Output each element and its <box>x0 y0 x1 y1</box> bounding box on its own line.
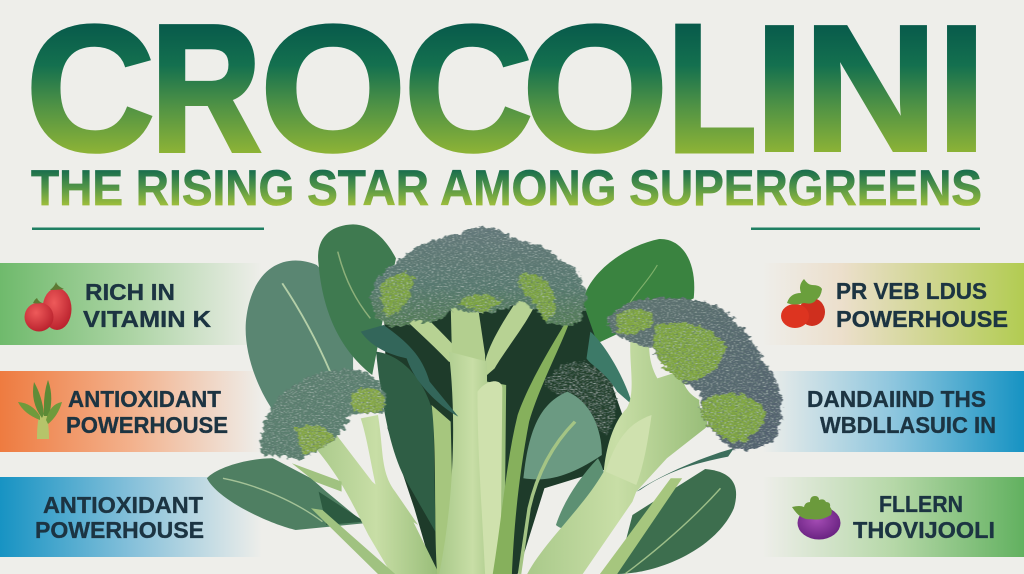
icon: tomatoes <box>24 282 72 332</box>
icon: purple onion <box>792 496 840 540</box>
floret: central green accents <box>380 273 556 322</box>
leaf: back top <box>318 224 396 375</box>
label: middle right text: DANDAIIND THS <box>807 386 986 412</box>
leaf: lower left <box>207 458 365 530</box>
label: rich in vitamin K <box>83 279 211 332</box>
label: bottom right text: THOVIJOOLI <box>853 517 995 543</box>
leaf: center front <box>520 392 602 574</box>
panel: top right <box>762 263 1024 345</box>
label: top right text <box>836 278 1008 332</box>
label: rich in vitamin K: RICH IN <box>85 279 175 305</box>
floret: right green center <box>617 309 766 442</box>
stem: thin far left <box>292 463 395 574</box>
stem: narrow blade <box>493 310 573 574</box>
floret: lower left <box>260 369 386 460</box>
label: rich in vitamin K: VITAMIN K <box>83 306 211 332</box>
panel: antioxidant powerhouse blue <box>0 477 262 557</box>
label: antioxidant powerhouse: ANTIOXIDANT <box>43 492 203 518</box>
floret: large right <box>608 298 782 450</box>
label: middle right text <box>807 386 996 438</box>
label: antioxidant powerhouse: ANTIOXIDANT <box>68 386 221 412</box>
title <box>26 0 986 190</box>
stem: right main <box>527 337 734 574</box>
leaf: center front lower <box>556 458 606 529</box>
stem: central <box>391 290 539 574</box>
leaf: small teal right <box>587 332 632 405</box>
dark inner foliage <box>384 302 625 574</box>
stem: side left <box>313 415 439 574</box>
panel: rich in vitamin K <box>0 263 262 345</box>
leaf: back right <box>583 239 694 348</box>
label: top right text: PR VEB LDUS <box>836 278 987 304</box>
panel: antioxidant powerhouse orange <box>0 371 262 452</box>
panel: bottom right <box>762 477 1024 557</box>
label: bottom right text <box>853 491 995 543</box>
label: antioxidant powerhouse <box>35 492 204 543</box>
label: top right text: POWERHOUSE <box>836 306 1008 332</box>
dark floret behind <box>544 362 616 435</box>
label: antioxidant powerhouse: POWERHOUSE <box>66 412 228 438</box>
label: antioxidant powerhouse: POWERHOUSE <box>35 517 204 543</box>
label: middle right text: WBDLLASUIC IN <box>820 412 996 438</box>
icon: tomatoes with leaves <box>781 279 825 328</box>
label: antioxidant powerhouse <box>66 386 228 438</box>
floret: large central <box>371 227 586 327</box>
illustration: crocolini bunch <box>207 224 782 574</box>
leaf: lower right <box>617 469 736 574</box>
label: bottom right text: FLLERN <box>879 491 963 517</box>
leaf: small teal <box>361 325 458 417</box>
panel: middle right <box>762 371 1024 452</box>
icon: leafy plant <box>18 380 62 439</box>
stem: thin inner <box>432 405 453 574</box>
floret: lower left accents <box>296 388 386 455</box>
leaf: inner dark left <box>376 352 435 532</box>
leaf: back left <box>246 261 353 410</box>
